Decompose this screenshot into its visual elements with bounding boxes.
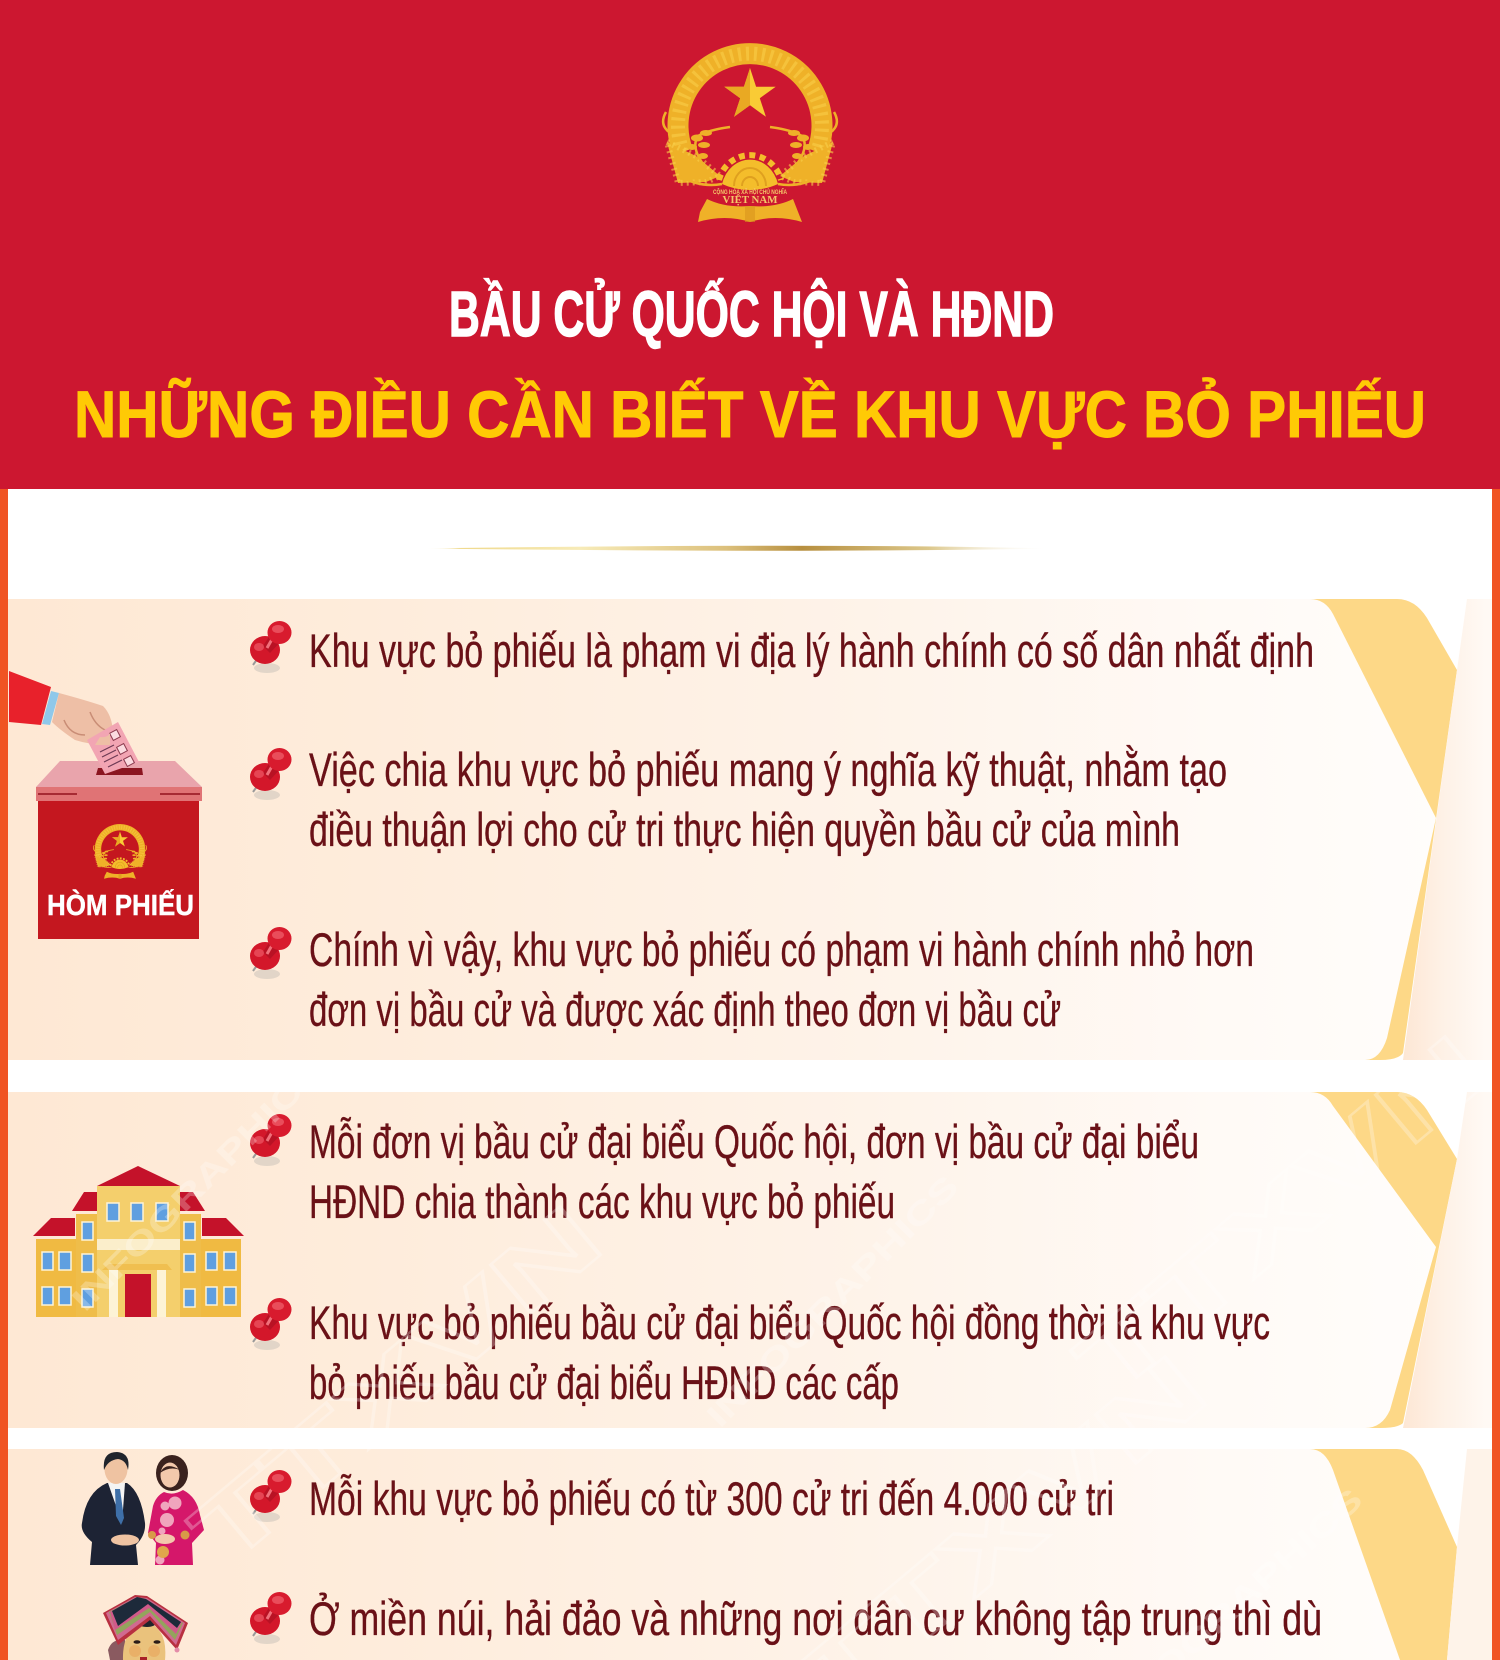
box label: HÒM PHIẾU — [47, 888, 194, 922]
panel 2 body — [8, 1092, 1436, 1428]
panel 3 body — [8, 1449, 1400, 1660]
bullet 3 line 2: đơn vị bầu cử và được xác định theo đơn vị bầu cử — [309, 983, 1061, 1036]
box lid top — [36, 761, 202, 787]
panel 2 yellow chevron — [1300, 1092, 1457, 1428]
bullet 7 — [250, 1592, 1322, 1645]
watermark: infographics — [64, 1052, 1369, 1660]
watermark: agency mark — [172, 1016, 1500, 1660]
hand — [52, 693, 113, 745]
right border stripe — [1492, 489, 1500, 1660]
bullet 5 line 2: bỏ phiếu bầu cử đại biểu HĐND các cấp — [309, 1356, 899, 1409]
bullet 2 line 2: điều thuận lợi cho cử tri thực hiện quyền bầu cử của mình — [309, 803, 1180, 856]
bullet 4 line 2: HĐND chia thành các khu vực bỏ phiếu — [309, 1175, 895, 1228]
icon: national emblem — [663, 54, 837, 222]
emblem curved caption: CỘNG HÒA XÃ HỘI CHỦ NGHĨA — [713, 188, 788, 196]
sleeve — [9, 671, 51, 725]
panel 2 — [8, 1092, 1492, 1428]
icon: government building — [33, 1166, 244, 1317]
box emblem — [93, 827, 147, 879]
left border stripe — [0, 489, 8, 1660]
bullet 1 — [250, 621, 1314, 677]
panel 1 yellow chevron — [1300, 599, 1457, 1060]
header band — [0, 0, 1500, 489]
box body — [38, 801, 199, 939]
watermark: agency mark: TTXVN — [1057, 1016, 1500, 1415]
bullet 2 — [250, 743, 1227, 856]
bullet 6 — [250, 1470, 1114, 1525]
emblem caption: VIỆT NAM — [722, 193, 778, 206]
bullet 3 — [250, 923, 1254, 1036]
woman — [156, 1455, 188, 1491]
icon: ethnic minority woman — [103, 1595, 188, 1660]
panel 1 fold — [1403, 599, 1492, 1060]
bullet 4 — [250, 1114, 1199, 1228]
watermark: infographics: INFOGRAPHICS — [64, 1052, 330, 1318]
panel 2 fold — [1403, 1092, 1492, 1428]
watermark: infographics: INFOGRAPHICS — [699, 1168, 965, 1434]
panel 3 yellow chevron — [1300, 1449, 1457, 1660]
watermark: agency mark: TTXVN — [172, 1186, 621, 1585]
gold divider — [422, 546, 1055, 551]
man — [82, 1483, 145, 1565]
panel 1 body — [8, 599, 1436, 1060]
bullet 6 text: Mỗi khu vực bỏ phiếu có từ 300 cử tri đến 4.000 cử tri — [309, 1472, 1114, 1525]
panel 3 — [8, 1449, 1492, 1660]
box lid front — [36, 787, 202, 801]
icon: hand casting ballot into box — [9, 671, 202, 939]
panel 3 fold — [1447, 1449, 1492, 1660]
title line 1: BẦU CỬ QUỐC HỘI VÀ HĐND — [449, 277, 1054, 350]
ballot slot — [96, 768, 143, 775]
panel 1 — [8, 599, 1492, 1060]
ballot paper — [87, 722, 139, 774]
bullet 5 — [250, 1296, 1270, 1409]
icon: man and woman voters — [82, 1452, 204, 1565]
